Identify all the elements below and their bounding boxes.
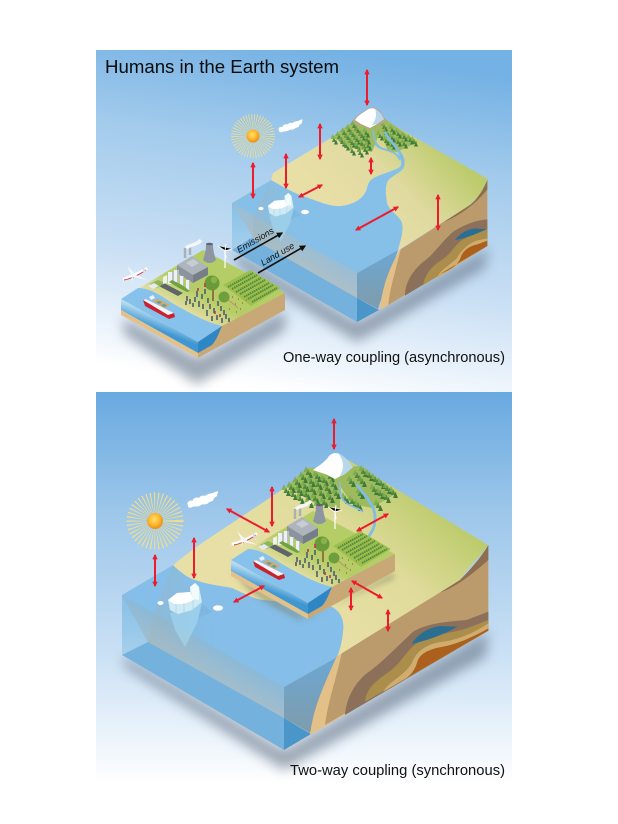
icon: sun bbox=[239, 122, 267, 150]
caption: one-way coupling: One-way coupling (asynchronous) bbox=[283, 350, 505, 366]
forest and mountain bbox=[330, 107, 418, 168]
Earth system block bbox=[232, 113, 488, 322]
arrow: emissions bbox=[234, 233, 282, 260]
title: Humans in the Earth system bbox=[105, 57, 339, 77]
panel: one-way coupling bbox=[96, 50, 512, 392]
icon: airplane bbox=[233, 530, 258, 548]
icon: sun bbox=[137, 503, 173, 539]
exchange arrows: one-way panel bbox=[253, 70, 438, 230]
icon: cloud bbox=[187, 491, 218, 508]
icon: iceberg bbox=[268, 193, 301, 242]
human system block bbox=[231, 501, 395, 619]
icon: cloud bbox=[279, 119, 303, 132]
shadow: Earth block bbox=[122, 631, 488, 770]
Earth system block bbox=[122, 455, 488, 750]
icon: airplane bbox=[124, 265, 148, 283]
label: emissions: Emissions bbox=[235, 225, 276, 255]
caption: two-way coupling: Two-way coupling (synchronous) bbox=[290, 763, 505, 779]
human system block bbox=[121, 240, 285, 358]
icon: iceberg bbox=[168, 583, 212, 647]
ice floes bbox=[158, 601, 223, 611]
arrow: land use bbox=[258, 246, 305, 273]
shadow: human system block bbox=[232, 568, 395, 620]
label: land use: Land use bbox=[259, 241, 296, 268]
forest and mountain bbox=[282, 453, 398, 538]
shadow: Earth block bbox=[232, 248, 488, 342]
panel: two-way coupling bbox=[96, 392, 512, 784]
exchange arrows: two-way panel bbox=[155, 419, 388, 631]
shadow: human system block bbox=[124, 310, 285, 384]
ice floes bbox=[258, 207, 309, 214]
